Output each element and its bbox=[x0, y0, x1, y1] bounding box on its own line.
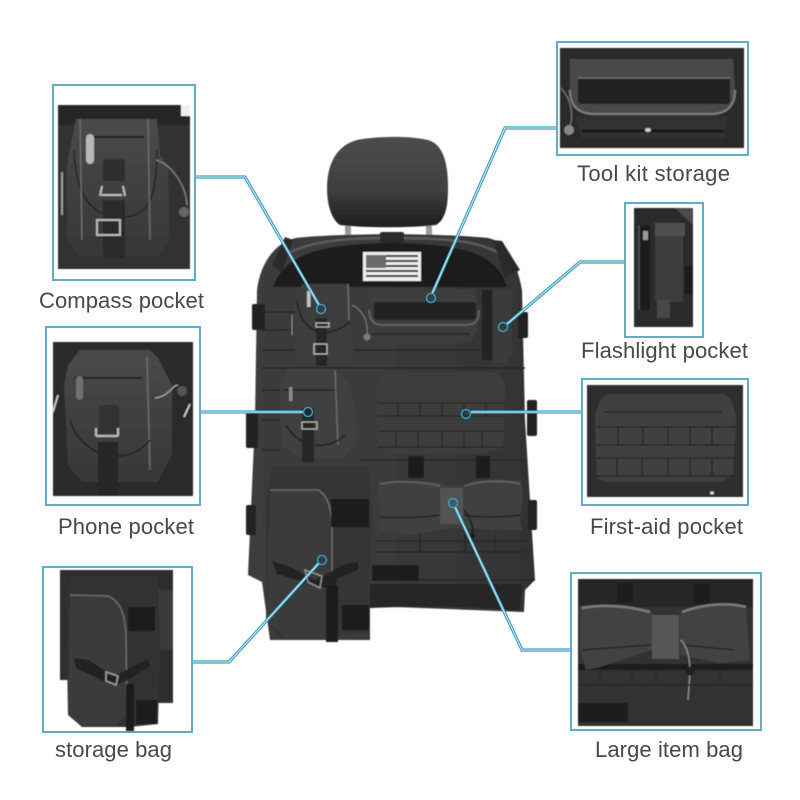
connector: flashlight pocket bbox=[498, 262, 625, 332]
first-aid pouch bbox=[377, 372, 505, 454]
tool kit pouch bbox=[369, 289, 479, 343]
connector: phone pocket bbox=[200, 408, 312, 416]
connector: large item bag bbox=[448, 498, 571, 650]
shoulder straps bbox=[272, 232, 520, 278]
connector: compass pocket bbox=[195, 177, 326, 314]
storage bag photo bbox=[60, 570, 173, 731]
headrest posts bbox=[345, 215, 432, 237]
snap tabs bbox=[408, 456, 490, 478]
label: first-aid pocket: First-aid pocket bbox=[590, 514, 743, 539]
large item bag photo bbox=[578, 579, 753, 726]
flashlight photo bbox=[634, 208, 693, 327]
velcro lower panel bbox=[370, 584, 523, 611]
side straps bbox=[246, 304, 537, 535]
panel: phone pocket bbox=[46, 327, 200, 505]
label: phone pocket: Phone pocket bbox=[58, 514, 194, 539]
flashlight pouch bbox=[482, 290, 512, 363]
flag patch bbox=[363, 252, 421, 281]
seat back panel bbox=[248, 234, 535, 640]
phone pouch bbox=[280, 369, 358, 462]
phone photo bbox=[53, 342, 193, 496]
compass pouch bbox=[292, 284, 354, 366]
panel: first-aid pocket bbox=[582, 379, 748, 505]
label: storage bag: storage bag bbox=[55, 737, 172, 762]
panel: large item bag bbox=[571, 573, 761, 730]
connector: first-aid pocket bbox=[462, 410, 582, 418]
top trim bbox=[275, 238, 500, 262]
headrest bbox=[327, 137, 448, 227]
seat illustration bbox=[246, 137, 537, 642]
panel: flashlight pocket bbox=[625, 203, 703, 337]
panel: storage bag bbox=[43, 567, 192, 732]
velcro top panel bbox=[273, 243, 507, 287]
label: compass pocket: Compass pocket bbox=[39, 288, 204, 313]
label: flashlight pocket: Flashlight pocket bbox=[581, 338, 748, 363]
panel: compass pocket bbox=[53, 85, 195, 280]
first-aid photo bbox=[587, 385, 743, 497]
webbing rows bbox=[262, 312, 535, 580]
label: tool kit storage: Tool kit storage bbox=[577, 161, 730, 186]
connector: tool kit storage bbox=[426, 128, 557, 302]
connector: storage bag bbox=[192, 556, 326, 662]
compass photo bbox=[58, 105, 190, 269]
storage bag bbox=[266, 466, 372, 642]
panel: tool kit storage bbox=[557, 42, 748, 155]
large item bag bbox=[378, 480, 523, 539]
cord and toggle bbox=[352, 305, 370, 340]
tool kit photo bbox=[560, 48, 744, 148]
velcro label strip bbox=[372, 565, 419, 581]
label: large item bag: Large item bag bbox=[595, 737, 743, 762]
